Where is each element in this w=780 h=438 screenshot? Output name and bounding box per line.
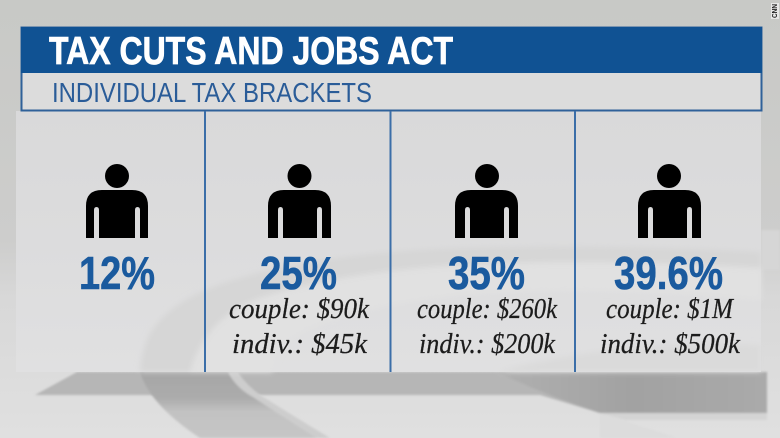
subtitle: INDIVIDUAL TAX BRACKETS bbox=[52, 77, 372, 108]
couple threshold: couple: $260k bbox=[417, 293, 558, 325]
header bbox=[21, 27, 762, 110]
individual threshold: indiv.: $500k bbox=[600, 328, 741, 360]
couple threshold: couple: $90k bbox=[229, 293, 370, 325]
curved ring bbox=[140, 372, 330, 438]
column: 39.6% bbox=[600, 164, 741, 360]
icon: person bbox=[268, 164, 331, 238]
percentage: 12% bbox=[79, 247, 155, 299]
column: 35% bbox=[417, 164, 558, 360]
individual threshold: indiv.: $45k bbox=[232, 328, 368, 360]
percentage: 35% bbox=[448, 247, 525, 299]
icon: person bbox=[455, 164, 518, 238]
column: 12% bbox=[79, 164, 155, 299]
percentage: 25% bbox=[260, 247, 337, 299]
title: TAX CUTS AND JOBS ACT bbox=[49, 30, 453, 73]
column: 25% bbox=[229, 164, 370, 360]
individual threshold: indiv.: $200k bbox=[419, 328, 556, 360]
CNN watermark: CNN bbox=[772, 4, 779, 18]
percentage: 39.6% bbox=[614, 247, 723, 299]
couple threshold: couple: $1M bbox=[606, 293, 735, 325]
icon: person bbox=[86, 164, 148, 238]
title bar bbox=[21, 27, 762, 73]
column dividers bbox=[205, 111, 575, 372]
panel: content background bbox=[16, 111, 761, 372]
panel shadow band bbox=[35, 372, 767, 438]
icon: person bbox=[638, 164, 701, 238]
